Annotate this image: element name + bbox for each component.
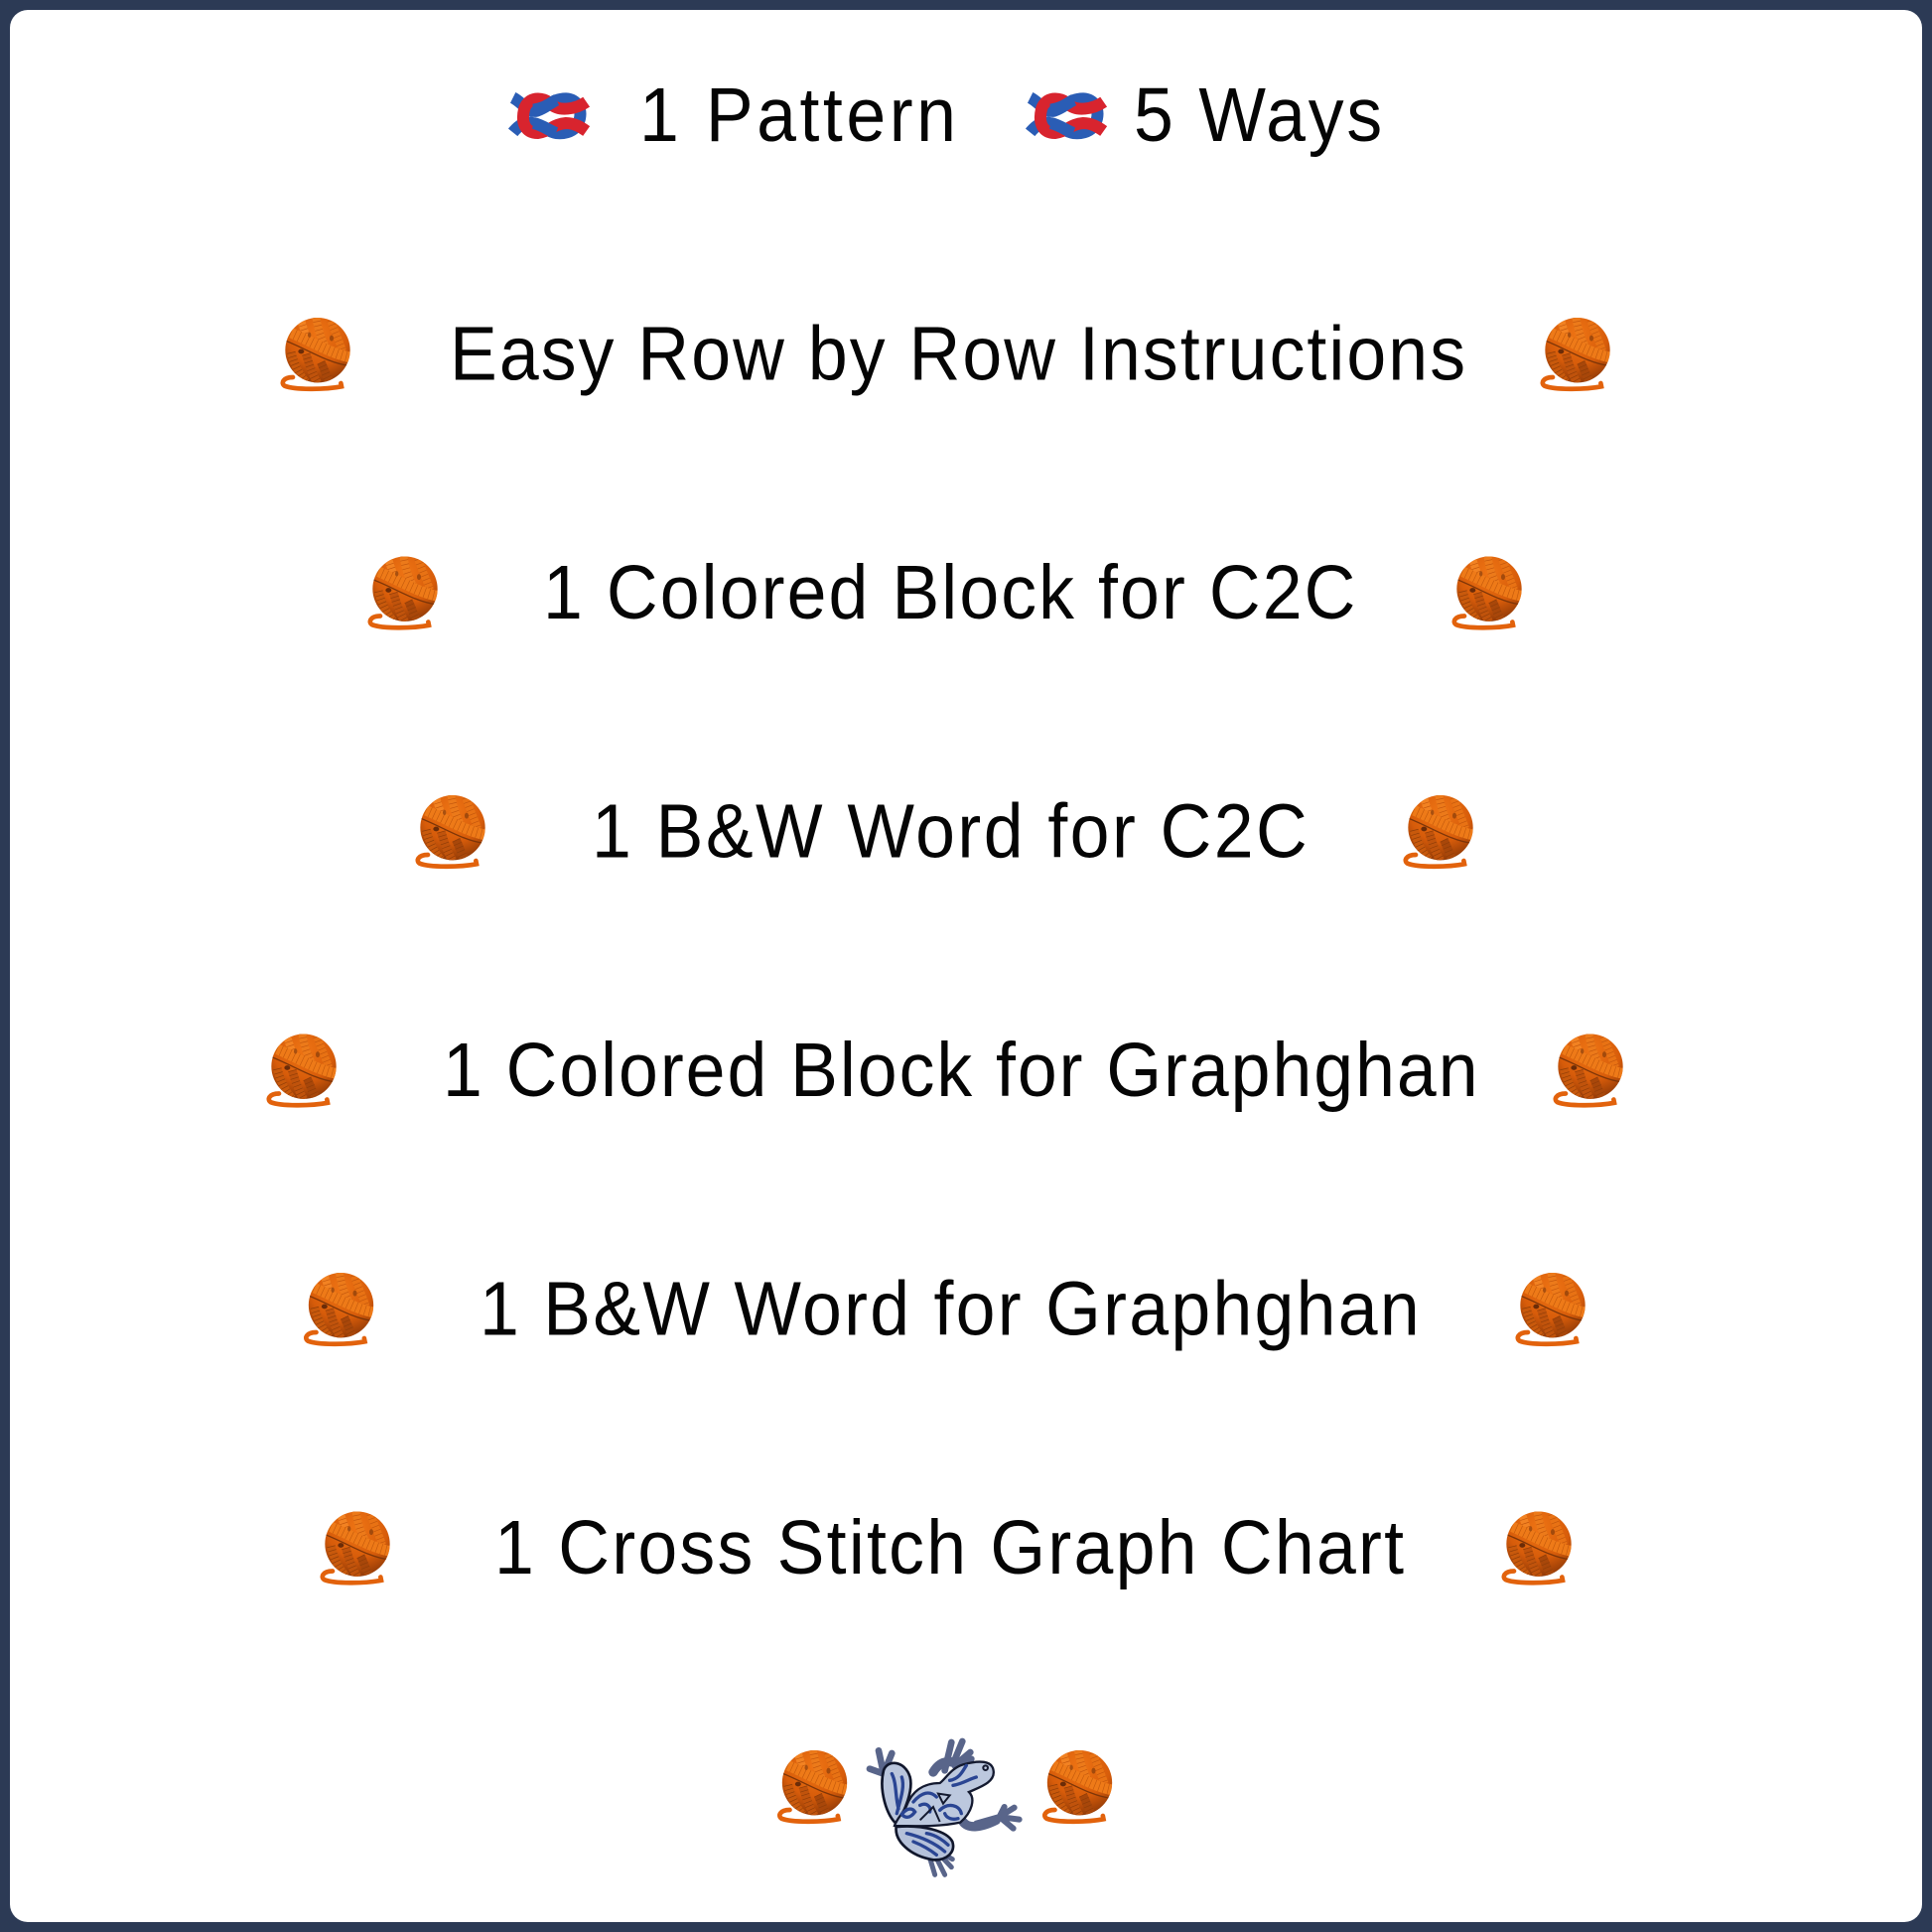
row text: Easy Row by Row Instructions — [450, 311, 1465, 396]
row text: 1 Colored Block for C2C — [543, 550, 1355, 635]
row: 1 Colored Block for Graphghan — [269, 1028, 1623, 1113]
footer ornament — [779, 1741, 1113, 1874]
row text: 1 Cross Stitch Graph Chart — [494, 1505, 1404, 1590]
icon: yarn ball left — [779, 1749, 848, 1822]
row: 1 B&W Word for Graphghan — [306, 1266, 1586, 1351]
icon: yarn ball right — [1504, 1511, 1572, 1583]
icon: yarn ball right — [1556, 1034, 1623, 1105]
icon: yarn ball left — [323, 1511, 390, 1583]
icon: knot left — [513, 97, 587, 133]
title text: 5 Ways: 5 Ways — [1134, 72, 1382, 158]
icon: yarn ball right — [1518, 1272, 1586, 1344]
icon: blue patterned frog — [870, 1741, 1020, 1874]
row: 1 B&W Word for C2C — [418, 788, 1473, 874]
row text: 1 B&W Word for C2C — [592, 788, 1308, 874]
icon: yarn ball right — [1543, 317, 1610, 389]
icon: yarn ball left — [306, 1272, 374, 1344]
row text: 1 Colored Block for Graphghan — [443, 1028, 1478, 1113]
row: 1 Colored Block for C2C — [370, 550, 1522, 635]
row: 1 Cross Stitch Graph Chart — [323, 1505, 1572, 1590]
icon: yarn ball right — [1406, 794, 1473, 867]
icon: yarn ball right — [1454, 556, 1522, 627]
icon: yarn ball left — [283, 317, 350, 389]
icon: yarn ball left — [269, 1034, 337, 1105]
title row — [513, 72, 1382, 158]
icon: yarn ball left — [370, 556, 438, 627]
icon: yarn ball left — [418, 794, 485, 867]
title text: 1 Pattern: 1 Pattern — [639, 72, 956, 158]
row text: 1 B&W Word for Graphghan — [480, 1266, 1420, 1351]
row: Easy Row by Row Instructions — [283, 311, 1610, 396]
icon: yarn ball right — [1044, 1749, 1113, 1822]
icon: knot right — [1031, 97, 1104, 133]
